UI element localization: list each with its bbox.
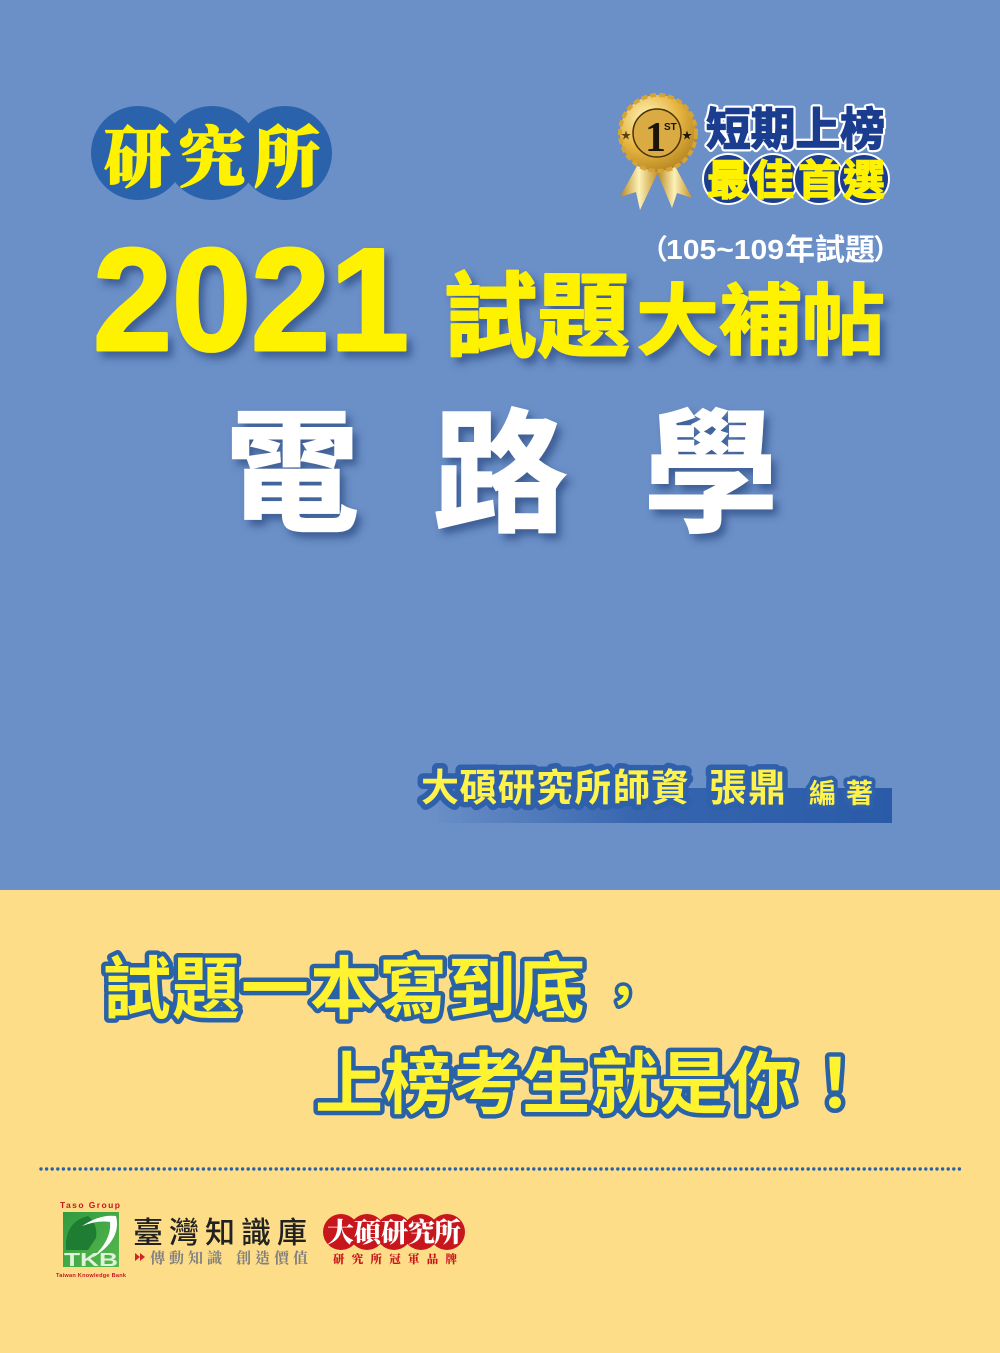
text: year range 105~109 xyxy=(640,234,901,267)
badge: 研究所 xyxy=(91,106,332,200)
slogan line 1: 試題一本寫到底 xyxy=(103,952,585,1028)
title: 電路學: 電 xyxy=(225,401,359,550)
text: year range 105~109: 105~109 xyxy=(666,234,784,265)
tagline: 傳動知識 創造價值: 傳動知識 xyxy=(150,1249,223,1267)
heading: 短期上榜: 短期上榜 xyxy=(706,104,885,155)
tagline: 傳動知識 創造價值: 創造價值 xyxy=(236,1249,308,1267)
background: blue upper panel xyxy=(0,0,1000,890)
icon: gold first place medal: ★ xyxy=(682,131,692,142)
slogan line 2: 上榜考生就是你！ xyxy=(315,1047,869,1123)
title: 電路學: 學 xyxy=(644,401,778,550)
heading: 短期上榜: 短期上榜 xyxy=(706,104,885,155)
logo: TKB Taiwan Knowledge Bank xyxy=(56,1200,127,1279)
tagline: 傳動知識 創造價值 xyxy=(135,1249,308,1267)
badge: 研究所: 研究所 xyxy=(104,123,320,196)
author: 大碩研究所師資: 大碩研究所師資 xyxy=(421,768,689,810)
author: 張鼎: 張鼎 xyxy=(709,768,786,810)
background: yellow lower panel xyxy=(0,890,1000,1353)
title: 2021: 2021 xyxy=(93,218,409,381)
tagline: 研究所冠軍品牌: 研究所冠軍品牌 xyxy=(333,1252,458,1266)
author: 編著: 編著 xyxy=(809,779,873,809)
logo: TKB Taiwan Knowledge Bank: Taiwan Knowledge Bank xyxy=(56,1273,127,1279)
title: 試題: 試題 xyxy=(444,267,630,369)
title: 電路學 xyxy=(225,401,778,550)
icon: gold first place medal: 1 xyxy=(645,115,666,161)
icon: gold first place medal: ★ xyxy=(621,131,631,142)
badge: 最佳首選: 最佳首選 xyxy=(707,157,885,204)
author ribbon xyxy=(430,788,892,823)
logo: TKB Taiwan Knowledge Bank: Taso Group xyxy=(60,1200,120,1210)
text: year range 105~109: 年試題 xyxy=(785,234,875,267)
icon: gold first place medal: ST xyxy=(664,122,677,133)
title: 電路學: 路 xyxy=(433,401,567,550)
logo: TKB Taiwan Knowledge Bank: TKB xyxy=(64,1250,118,1270)
logo text: 臺灣知識庫: 臺灣知識庫 xyxy=(133,1217,307,1250)
title: 大補帖: 大補帖 xyxy=(636,277,885,365)
text: year range 105~109: （ xyxy=(640,234,668,265)
logo: 大碩研究所: 大碩研究所 xyxy=(327,1217,461,1248)
icon: gold first place medal xyxy=(620,95,696,210)
dotted divider xyxy=(41,1167,960,1171)
text: year range 105~109: ） xyxy=(873,234,901,265)
slogan line 1: ， xyxy=(597,968,649,1026)
